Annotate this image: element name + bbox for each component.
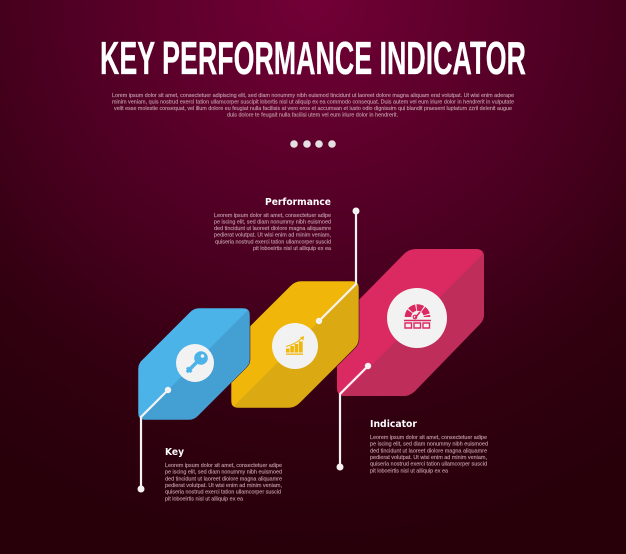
intro text block: minim veniam, quis nostrud exerci tation ullamcorper suscipit lobortis nisl ut aliquip ex ea commodo consequat. Duis autem vel eum iriure dolor in hendrerit in vulputate xyxy=(112,100,514,106)
text block: key: ded tincidunt ut laoreet diolore magna aliquamre xyxy=(165,476,282,482)
text block: performance: Performance xyxy=(265,197,331,208)
text block: indicator: pit loboeirtis nisl ut alliquip ex ea xyxy=(370,468,449,474)
text block: indicator: Leorem ipsum dolor sit amet, consectetuer adipe xyxy=(370,435,487,441)
text block: key: pedierat volutpat. Ut wisi enim ad minim veniam, xyxy=(165,483,282,489)
text block: indicator: quiseria nostrud exerci tation ullamcorper suscid xyxy=(370,462,487,468)
intro text block: Lorem ipsum dolor sit amet, consectetuer adipiscing elit, sed diam nonummy nibh euismod tincidunt ut laoreet dolore magna aliquam erat volutpat. Ut wisi enim aderape xyxy=(112,93,514,99)
text block: performance: pedierat volutpat. Ut wisi enim ad minim veniam, xyxy=(214,233,331,239)
icon: growth chart xyxy=(286,336,304,355)
icon: key xyxy=(187,351,208,372)
text block: performance: quiseria nostrud exerci tation ullamcorper suscid xyxy=(215,239,331,245)
text block: indicator: ded tincidunt ut laoreet diolore magna aliquamre xyxy=(370,448,487,454)
text block: key: pe iscing elit, sed diam nonummy nibh euismoed xyxy=(165,470,282,476)
text block: indicator: pedierat volutpat. Ut wisi enim ad minim veniam, xyxy=(370,455,487,461)
text block: key: pit loboeirtis nisl ut alliquip ex ea xyxy=(165,496,244,502)
panel: key hexagon xyxy=(138,308,250,420)
text block: key xyxy=(165,447,282,502)
connector: indicator xyxy=(336,363,371,470)
text block: indicator xyxy=(370,419,488,474)
text block: indicator: pe iscing elit, sed diam nonummy nibh euismoed xyxy=(370,442,488,448)
text block: performance: pe iscing elit, sed diam nonummy nibh euismoed xyxy=(214,220,331,226)
text block: performance: Leorem ipsum dolor sit amet, consectetuer adipe xyxy=(214,213,331,219)
intro text block: velit esse molestie consequat, vel illum dolore eu feugiat nulla facilisis at vero eros et accumsan et iusto odio dignissim qui blandit praesent luptatum zzril delenit augue xyxy=(114,106,512,112)
text block: performance xyxy=(214,197,332,252)
text block: performance: ded tincidunt ut laoreet diolore magna aliquamre xyxy=(214,226,331,232)
text block: indicator: Indicator xyxy=(370,419,417,430)
text block: performance: pit loboeirtis nisl ut alliquip ex ea xyxy=(253,246,332,252)
icon: speedometer gauge xyxy=(404,308,431,328)
panel: performance hexagon xyxy=(229,279,365,412)
panel: indicator hexagon xyxy=(335,247,490,400)
intro text block: duis dolore te feugait nulla facilisi utem vel eum iriure dolor in hendrerit. xyxy=(227,112,398,118)
intro text block xyxy=(112,93,514,118)
text block: key: quiseria nostrud exerci tation ullamcorper suscid xyxy=(165,490,281,496)
connector: key xyxy=(138,387,171,492)
pagination dots xyxy=(290,140,336,148)
text block: key: Key xyxy=(165,447,185,458)
text block: key: Leorem ipsum dolor sit amet, consectetuer adipe xyxy=(165,463,282,469)
connector: performance xyxy=(316,208,360,324)
